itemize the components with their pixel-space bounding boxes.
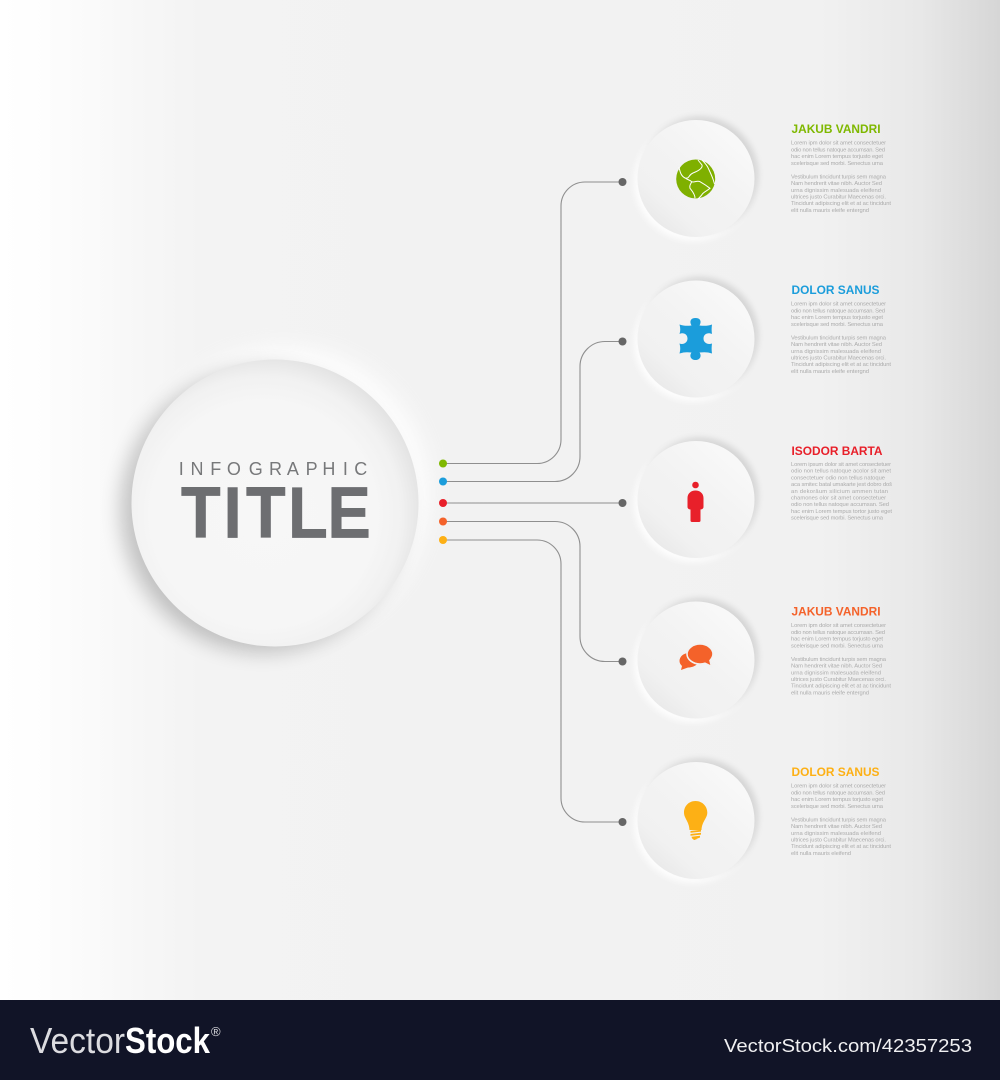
paragraphs: urna dignissim malesuada eleifend bbox=[791, 831, 881, 837]
paragraphs: Vestibulum tincidunt turpis sem magna bbox=[791, 657, 887, 663]
connector lines bbox=[443, 182, 622, 822]
paragraphs: scelerisque sed morbi. Senectus urna bbox=[791, 804, 884, 810]
paragraphs: Nam hendrerit vitae nibh. Auctor Sed bbox=[791, 342, 882, 348]
item circle 5 bbox=[634, 759, 758, 883]
paragraphs: urna dignissim malesuada eleifend bbox=[791, 670, 881, 676]
footer bar bbox=[0, 1000, 1000, 1080]
paragraph: hac enim Lorem tempus tortor justo eget bbox=[791, 509, 892, 515]
icon: puzzle piece bbox=[680, 318, 712, 360]
paragraphs: odio non tellus natoque accumsan. Sed bbox=[791, 147, 885, 153]
paragraphs: odio non tellus natoque accumsan. Sed bbox=[791, 308, 885, 314]
paragraphs: scelerisque sed morbi. Senectus urna bbox=[791, 322, 884, 328]
paragraphs: hac enim Lorem tempus torjusto eget bbox=[791, 154, 883, 160]
paragraphs: Lorem ipm dolor sit amet consectetuer bbox=[791, 141, 886, 147]
paragraphs: Nam hendrerit vitae nibh. Auctor Sed bbox=[791, 824, 882, 830]
heading: title: TITLE bbox=[181, 473, 371, 553]
paragraph: an dekorâum silicium ammen tutan bbox=[791, 489, 888, 495]
paragraphs: elit nulla mauris eleife entergnd bbox=[791, 690, 869, 696]
main circle with title bbox=[121, 346, 430, 652]
paragraphs: elit nulla mauris eleife entergnd bbox=[791, 208, 869, 214]
paragraphs: Tincidunt adipiscing elit et at ac tincidunt bbox=[791, 362, 891, 368]
paragraphs: elit nulla mauris eleife entergnd bbox=[791, 369, 869, 375]
text block 1 bbox=[791, 123, 891, 214]
item circle 4 bbox=[634, 598, 758, 722]
paragraphs: odio non tellus natoque accumsan. Sed bbox=[791, 630, 885, 636]
icon: speech bubbles bbox=[680, 644, 713, 670]
heading: Jakub Vandri: JAKUB VANDRI bbox=[792, 606, 880, 618]
paragraphs: Lorem ipm dolor sit amet consectetuer bbox=[791, 623, 886, 629]
item circle 3 bbox=[634, 438, 758, 562]
paragraphs: Nam hendrerit vitae nibh. Auctor Sed bbox=[791, 664, 882, 670]
paragraphs: Tincidunt adipiscing elit et at ac tincidunt bbox=[791, 844, 891, 850]
footer logo: Vector bbox=[30, 1020, 125, 1061]
paragraph: aca smitec batal umakarte jest dobro doš bbox=[791, 482, 892, 488]
paragraphs: Lorem ipm dolor sit amet consectetuer bbox=[791, 784, 886, 790]
footer url: VectorStock.com/42357253 bbox=[724, 1035, 972, 1056]
paragraphs bbox=[791, 623, 891, 696]
paragraph: odio non tellus natoque acolor sit amet bbox=[791, 469, 891, 475]
text block 2 bbox=[791, 284, 891, 375]
paragraphs: scelerisque sed morbi. Senectus urna bbox=[791, 161, 884, 167]
text block 4 bbox=[791, 606, 891, 696]
paragraphs: scelerisque sed morbi. Senectus urna bbox=[791, 643, 884, 649]
heading: Dolor Sanus: DOLOR SANUS bbox=[792, 766, 880, 779]
paragraphs bbox=[791, 302, 891, 375]
paragraphs: ultrices justo Curabitur Maecenas orci. bbox=[791, 356, 886, 362]
paragraphs: ultrices justo Curabitur Maecenas orci. bbox=[791, 838, 886, 844]
paragraphs: ultrices justo Curabitur Maecenas orci. bbox=[791, 677, 886, 683]
paragraphs: hac enim Lorem tempus torjusto eget bbox=[791, 797, 883, 803]
heading: Dolor Sanus: DOLOR SANUS bbox=[792, 284, 880, 297]
paragraphs: urna dignissim malesuada eleifend bbox=[791, 188, 881, 194]
heading: infographic: INFOGRAPHIC bbox=[179, 459, 367, 479]
paragraph: odio non tellus natoque accumsan. Sed bbox=[791, 502, 889, 508]
paragraph: Lorem ipsum dolor sit amet consectetuer bbox=[791, 462, 891, 468]
paragraph: consectetuer odio non tellus natoque bbox=[791, 475, 885, 481]
footer logo bbox=[30, 1020, 221, 1061]
paragraph: chamones olor sit amet consectetuer bbox=[791, 496, 886, 502]
paragraphs: odio non tellus natoque accumsan. Sed bbox=[791, 790, 885, 796]
heading: Isodor Barta: ISODOR BARTA bbox=[792, 445, 883, 458]
heading: Jakub Vandri: JAKUB VANDRI bbox=[792, 123, 880, 136]
paragraphs: Tincidunt adipiscing elit et at ac tincidunt bbox=[791, 201, 891, 207]
start dots bbox=[439, 460, 447, 544]
item circle 2 bbox=[634, 278, 758, 402]
paragraphs: urna dignissim malesuada eleifend bbox=[791, 349, 881, 355]
icon: globe bbox=[676, 160, 715, 199]
paragraphs: Vestibulum tincidunt turpis sem magna bbox=[791, 817, 887, 823]
paragraphs: elit nulla mauris eleifend bbox=[791, 851, 851, 857]
paragraphs: ultrices justo Curabitur Maecenas orci. bbox=[791, 194, 886, 200]
footer logo: Stock bbox=[125, 1020, 211, 1061]
footer logo: ® bbox=[211, 1024, 221, 1039]
text block 5 bbox=[791, 766, 891, 857]
paragraphs bbox=[791, 784, 891, 857]
icon: light bulb bbox=[684, 801, 707, 840]
paragraphs: hac enim Lorem tempus torjusto eget bbox=[791, 315, 883, 321]
paragraph bbox=[791, 462, 892, 522]
paragraphs bbox=[791, 141, 891, 214]
paragraphs: Tincidunt adipiscing elit et at ac tincidunt bbox=[791, 684, 891, 690]
end dots bbox=[618, 178, 626, 826]
icon: person bbox=[688, 482, 704, 522]
text block 3 bbox=[791, 445, 892, 522]
paragraphs: hac enim Lorem tempus torjusto eget bbox=[791, 637, 883, 643]
paragraphs: Vestibulum tincidunt turpis sem magna bbox=[791, 174, 887, 180]
paragraphs: Vestibulum tincidunt turpis sem magna bbox=[791, 335, 887, 341]
paragraph: scelerisque sed morbi. Senectus urna bbox=[791, 516, 884, 522]
paragraphs: Nam hendrerit vitae nibh. Auctor Sed bbox=[791, 181, 882, 187]
paragraphs: Lorem ipm dolor sit amet consectetuer bbox=[791, 302, 886, 308]
item circle 1 bbox=[634, 117, 758, 241]
